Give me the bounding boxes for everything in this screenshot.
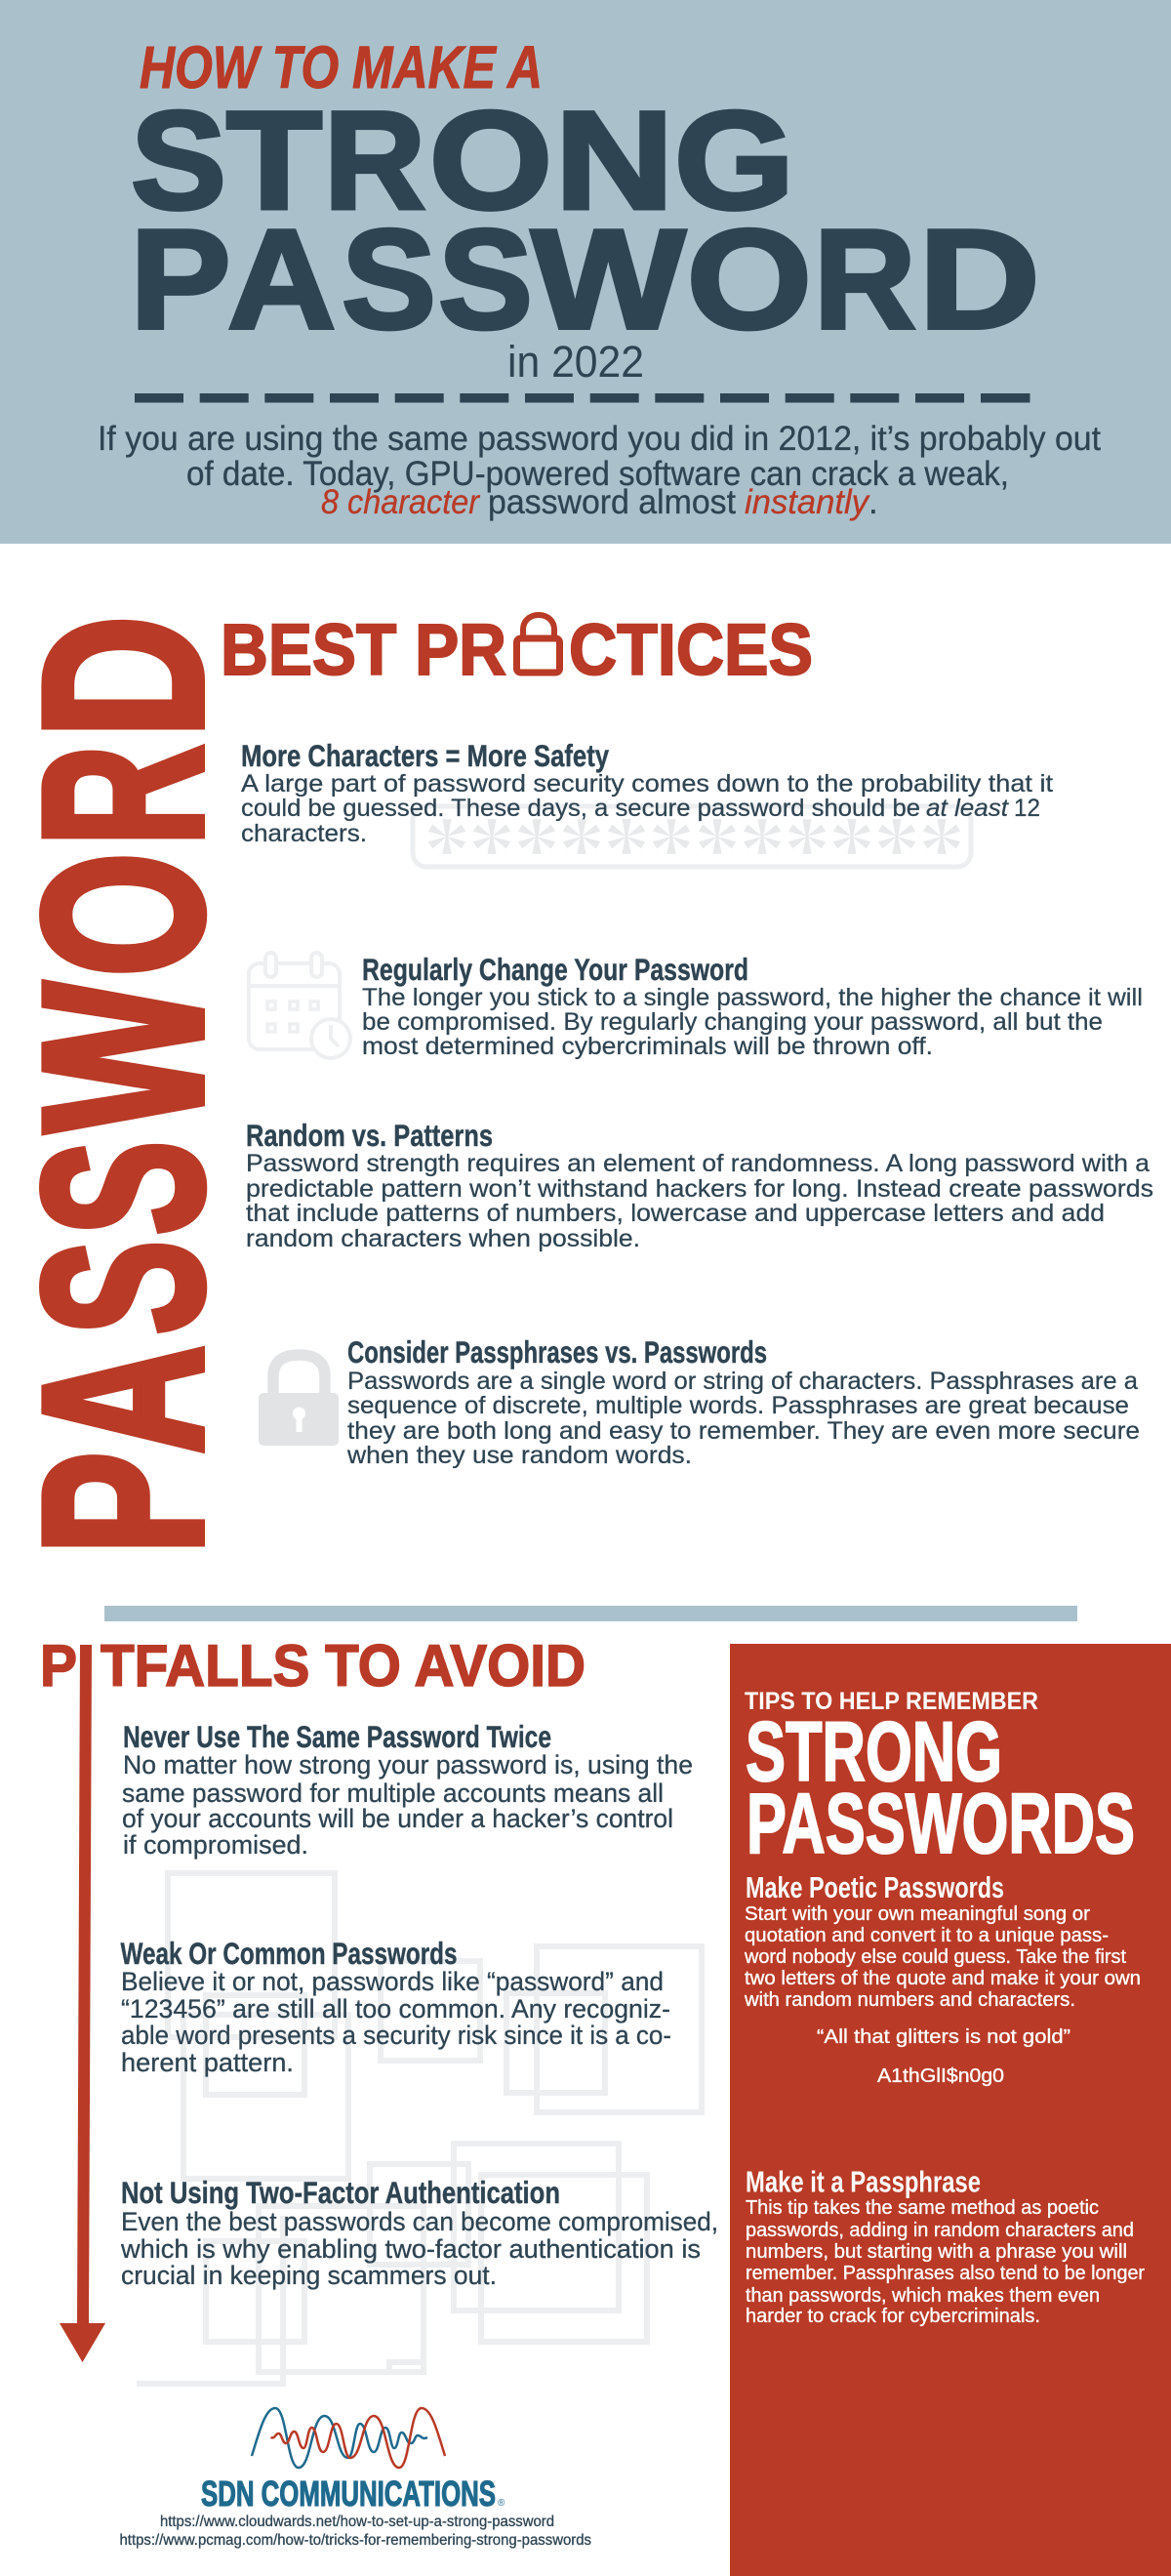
text block: same password twice: if compromised.: [123, 1830, 308, 1860]
vertical heading: password: P: [0, 1452, 250, 1554]
logo: SDN Communications: [201, 2408, 505, 2514]
text block: same password twice: Never Use The Same Password Twice: [123, 1719, 551, 1754]
text block: same password twice: No matter how strong your password is, using the: [123, 1750, 693, 1779]
text block: regularly change: [362, 952, 1143, 1060]
title: password: A: [227, 200, 336, 358]
intro text: 8 character: [321, 483, 480, 521]
example quote: “All that glitters is not gold”: [817, 2026, 1070, 2048]
title: password: W: [531, 200, 686, 358]
intro text: .: [868, 483, 878, 521]
text block: weak passwords: able word presents a security risk since it is a co-: [121, 2021, 671, 2050]
text block: passphrases: when they use random words.: [346, 1442, 692, 1469]
text block: passphrases: Consider Passphrases vs. Passwords: [347, 1334, 767, 1370]
text block: random vs patterns: [246, 1118, 1153, 1252]
text block: random vs patterns: random characters when possible.: [246, 1225, 640, 1252]
logo wordmark: SDN COMMUNICATIONS: [201, 2474, 496, 2514]
tip: passphrase: passwords, adding in random characters and: [746, 2220, 1134, 2241]
title: password: R: [814, 200, 916, 358]
text block: regularly change: Regularly Change Your Password: [362, 952, 748, 987]
source links: https://www.cloudwards.net/how-to-set-up-a-strong-password: [160, 2514, 554, 2530]
text block: same password twice: [122, 1719, 693, 1860]
vertical heading: password: O: [0, 852, 250, 977]
title: password: D: [918, 200, 1040, 358]
text block: passphrases: Passwords are a single word or string of characters. Passphrases are a: [347, 1368, 1138, 1395]
text block: more characters: at least: [926, 795, 1009, 822]
text block: more characters: characters.: [241, 820, 367, 847]
tip: passphrase: harder to crack for cybercriminals.: [746, 2306, 1040, 2327]
vertical heading: password: S: [0, 1241, 250, 1334]
tip: passphrase: Make it a Passphrase: [746, 2165, 981, 2198]
heading: pitfalls to avoid: TFALLS TO AVOID: [101, 1633, 586, 1698]
tip: passphrase: [746, 2165, 1145, 2327]
tip: passphrase: This tip takes the same method as poetic: [746, 2197, 1099, 2219]
section divider bar: [104, 1606, 1077, 1621]
text block: regularly change: be compromised. By regularly changing your password, all but the: [362, 1008, 1103, 1036]
text block: more characters: [241, 738, 1053, 847]
title: password: S: [342, 200, 436, 358]
title: strong: O: [429, 84, 552, 238]
text block: random vs patterns: predictable pattern won’t withstand hackers for long. Instead create passwords: [246, 1175, 1153, 1203]
text block: regularly change: The longer you stick to a single password, the higher the chance it will: [362, 984, 1143, 1011]
logo wave: blue: [252, 2408, 427, 2468]
source links: https://www.pcmag.com/how-to/tricks-for-remembering-strong-passwords: [119, 2532, 591, 2549]
text block: passphrases: sequence of discrete, multiple words. Passphrases are great because: [347, 1392, 1129, 1419]
title: password: P: [130, 200, 231, 358]
icon: password field: [413, 806, 971, 867]
vertical heading: password: S: [0, 1141, 250, 1235]
tip: poetic passwords: word nobody else could guess. Take the first: [744, 1946, 1126, 1968]
title: strong: T: [226, 84, 322, 238]
tip: poetic passwords: [744, 1870, 1141, 2011]
intro text: of date. Today, GPU-powered software can crack a weak,: [186, 455, 1009, 493]
text block: weak passwords: Weak Or Common Passwords: [121, 1936, 457, 1971]
icon: padlock letter A: [517, 615, 560, 673]
text block: weak passwords: [121, 1936, 671, 2077]
text block: passphrases: they are both long and easy to remember. They are even more secure: [347, 1417, 1140, 1445]
logo wave: red: [271, 2408, 445, 2468]
text block: more characters: could be guessed. These days, a secure password should be: [241, 795, 920, 822]
text block: two-factor authentication: Not Using Two-Factor Authentication: [121, 2175, 560, 2210]
title: strong: S: [131, 84, 226, 238]
text block: passphrases: [346, 1334, 1140, 1469]
tip: poetic passwords: with random numbers and characters.: [744, 1989, 1075, 2011]
registered mark: ®: [498, 2498, 505, 2509]
panel title: strong: STRONG: [746, 1705, 1002, 1799]
vertical heading: password: D: [0, 616, 250, 738]
example password: A1thGlI$n0g0: [877, 2065, 1004, 2087]
intro text: [98, 420, 1101, 521]
title: strong: R: [324, 84, 425, 238]
intro text: instantly: [745, 483, 870, 521]
intro text: If you are using the same password you did in 2012, it’s probably out: [98, 420, 1101, 458]
background pattern squares: [137, 1873, 702, 2384]
heading: best practices: BEST PR: [221, 609, 506, 690]
tip: poetic passwords: quotation and convert it to a unique pass-: [745, 1925, 1109, 1946]
text block: regularly change: most determined cybercriminals will be thrown off.: [362, 1033, 933, 1060]
text block: two-factor authentication: Even the best passwords can become compromised,: [121, 2207, 718, 2236]
arrow: downward pitfall arrow: [60, 1645, 105, 2362]
text block: same password twice: same password for multiple accounts means all: [122, 1779, 664, 1808]
text block: random vs patterns: Password strength requires an element of randomness. A long password with a: [246, 1150, 1150, 1177]
title: password: S: [438, 200, 533, 358]
tip: passphrase: remember. Passphrases also tend to be longer: [746, 2263, 1145, 2284]
tip: passphrase: than passwords, which makes them even: [746, 2285, 1100, 2307]
text block: same password twice: of your accounts will be under a hacker’s control: [122, 1804, 673, 1833]
text block: random vs patterns: Random vs. Patterns: [246, 1118, 493, 1153]
text block: more characters: A large part of password security comes down to the probability that it: [241, 770, 1053, 797]
intro text: password almost: [488, 483, 736, 521]
vertical heading: password: A: [0, 1345, 250, 1453]
text block: more characters: More Characters = More Safety: [241, 738, 609, 773]
text block: weak passwords: herent pattern.: [121, 2048, 294, 2077]
text block: weak passwords: “123456” are still all too common. Any recogniz-: [121, 1994, 670, 2024]
vertical heading: password: [0, 616, 250, 1554]
title: how to make a: HOW TO MAKE A: [140, 34, 543, 101]
tip: poetic passwords: Start with your own meaningful song or: [745, 1903, 1090, 1925]
icon: calendar with clock: [249, 953, 350, 1058]
vertical heading: password: W: [0, 982, 250, 1132]
heading: best practices: [221, 609, 813, 690]
text block: random vs patterns: that include patterns of numbers, lowercase and uppercase letters and add: [246, 1200, 1105, 1227]
title: strong: G: [674, 84, 794, 238]
text block: weak passwords: Believe it or not, passwords like “password” and: [121, 1967, 664, 1996]
tip: poetic passwords: two letters of the quote and make it your own: [745, 1968, 1141, 1989]
title: year: in 2022: [507, 337, 644, 387]
tip: passphrase: numbers, but starting with a phrase you will: [746, 2241, 1127, 2263]
vertical heading: password: R: [0, 745, 250, 845]
panel: header: [0, 0, 1171, 544]
panel: tips to help remember: [730, 1644, 1171, 2576]
icon: solid padlock: [259, 1355, 339, 1446]
text block: two-factor authentication: which is why enabling two-factor authentication is: [120, 2234, 701, 2264]
title: password: O: [687, 200, 812, 358]
source links: [119, 2514, 591, 2549]
text block: two-factor authentication: [120, 2175, 718, 2290]
title: strong: N: [554, 84, 674, 238]
dashed divider: [135, 393, 1030, 402]
heading: pitfalls to avoid: P: [40, 1633, 77, 1698]
text block: more characters: 12: [1014, 795, 1040, 822]
heading: best practices: CTICES: [569, 609, 813, 690]
text block: two-factor authentication: crucial in keeping scammers out.: [121, 2261, 497, 2290]
tip: poetic passwords: Make Poetic Passwords: [746, 1870, 1004, 1904]
panel kicker: TIPS TO HELP REMEMBER: [745, 1688, 1038, 1715]
